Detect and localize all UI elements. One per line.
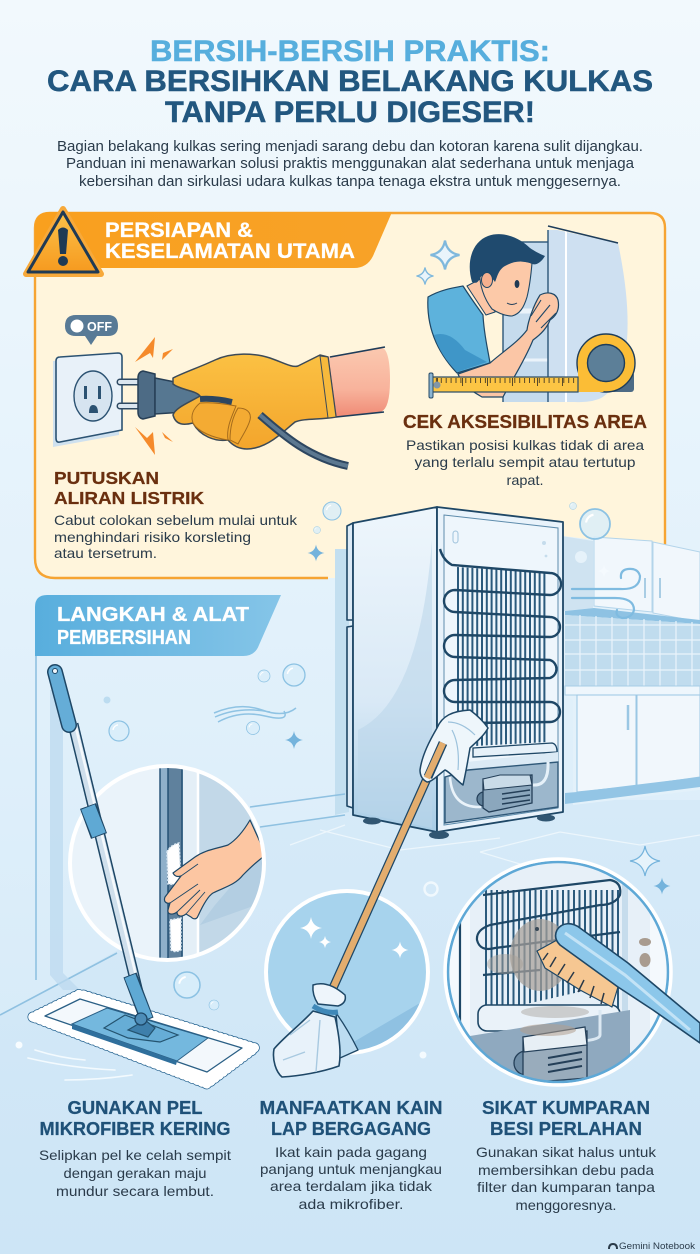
top cloth: [420, 710, 488, 785]
mop handle: [52, 668, 147, 1025]
heading: cek aksesibilitas area: CEK AKSESIBILITAS AREA: [403, 411, 647, 432]
fridge wall shadow block: [335, 549, 349, 815]
text: cek aksesibilitas area: Pastikan posisi kulkas tidak di area: [406, 437, 644, 453]
icon: wind lines: [572, 569, 640, 618]
panel: persiapan dan keselamatan: [26, 209, 665, 600]
fridge coil pipe: [440, 549, 561, 723]
step 2 heading: LAP BERGAGANG: [271, 1119, 431, 1139]
gemini notebook credit: Gemini Notebook: [619, 1241, 695, 1252]
step 1 text: [39, 1147, 231, 1199]
heading: putuskan aliran listrik: PUTUSKAN: [54, 468, 159, 488]
cloth on pole illustration: [273, 710, 488, 1077]
step 3 heading: BESI PERLAHAN: [490, 1119, 642, 1139]
circle: hand sliding microfiber into gap: [68, 764, 266, 962]
icon: off switch bubble: OFF: [87, 320, 112, 334]
kitchen background: [555, 535, 700, 805]
text: cek aksesibilitas area: rapat.: [506, 472, 544, 488]
step 3 text: membersihkan debu pada: [478, 1162, 654, 1178]
intro paragraph: Bagian belakang kulkas sering menjadi sarang debu dan kotoran karena sulit dijangkau.: [57, 139, 643, 155]
icon: sparks: [135, 337, 173, 455]
panel header: [35, 212, 392, 268]
panel header: KESELAMATAN UTAMA: [105, 240, 355, 263]
step 1 text: dengan gerakan maju: [64, 1165, 206, 1181]
text: putuskan aliran listrik: atau tersetrum.: [54, 545, 157, 561]
icon: wall outlet: [53, 353, 122, 447]
bottom cloth: [336, 1013, 358, 1058]
heading: putuskan aliran listrik: [54, 468, 204, 508]
title: [47, 35, 653, 129]
title: TANPA PERLU DIGESER!: [165, 96, 535, 129]
step 2 text: panjang untuk menjangkau: [260, 1161, 442, 1177]
icon: man checking fridge with tape measure: [428, 226, 635, 407]
step 2 text: area terdalam jika tidak: [270, 1178, 433, 1194]
step 1 heading: [40, 1098, 230, 1139]
icon: off switch bubble: [65, 315, 118, 345]
fridge cooling fins: [457, 562, 548, 752]
step 3 text: filter dan kumparan tanpa: [477, 1179, 655, 1195]
heading: putuskan aliran listrik: ALIRAN LISTRIK: [54, 488, 204, 508]
step 1 heading: MIKROFIBER KERING: [40, 1119, 230, 1139]
step 2 text: Ikat kain pada gagang: [275, 1144, 427, 1160]
step 3 text: Gunakan sikat halus untuk: [476, 1144, 657, 1160]
text: cek aksesibilitas area: yang terlalu sempit atau tertutup: [414, 454, 636, 470]
step 2 heading: MANFAATKAN KAIN: [260, 1098, 442, 1118]
section banner: langkah dan alat: [35, 595, 281, 656]
step 1 heading: GUNAKAN PEL: [68, 1098, 202, 1118]
floor: [0, 790, 700, 1254]
circle: brushing dust from coil: [445, 859, 700, 1090]
icon: warning triangle: [26, 209, 101, 274]
icon: scrub brush: [537, 924, 700, 1043]
step 2 heading: [260, 1098, 442, 1139]
step 2 text: ada mikrofiber.: [298, 1196, 404, 1212]
mop illustration: [16, 668, 255, 1084]
mop shadow: [50, 690, 80, 990]
intro paragraph: [57, 139, 643, 190]
text: putuskan aliran listrik: Cabut colokan sebelum mulai untuk: [54, 512, 298, 528]
bubbles and sparkles around fridge: [104, 502, 670, 1058]
intro paragraph: kebersihan dan sirkulasi udara kulkas tanpa tenaga ekstra untuk menggesernya.: [79, 174, 621, 190]
step 3 text: menggoresnya.: [516, 1197, 616, 1213]
step 1 text: Selipkan pel ke celah sempit: [39, 1147, 231, 1163]
step 3 heading: [482, 1098, 650, 1139]
intro paragraph: Panduan ini menawarkan solusi praktis menggunakan alat sederhana untuk menjaga: [66, 156, 635, 172]
text: putuskan aliran listrik: menghindari risiko korsleting: [54, 529, 251, 545]
title: CARA BERSIHKAN BELAKANG KULKAS: [47, 65, 653, 98]
text: cek aksesibilitas area: [406, 437, 644, 488]
fridge back illustration: [347, 507, 563, 839]
section banner: langkah dan alat: PEMBERSIHAN: [57, 627, 191, 649]
step 3 heading: SIKAT KUMPARAN: [482, 1098, 650, 1118]
decorative floor tiles: [290, 825, 700, 870]
text: putuskan aliran listrik: [54, 512, 298, 561]
circle: cloth mop spot: [266, 891, 428, 1060]
mop head: [33, 994, 255, 1084]
icon: plug and gloved hand: [120, 347, 390, 466]
title: BERSIH-BERSIH PRAKTIS:: [150, 35, 550, 68]
step 1 text: mundur secara lembut.: [56, 1183, 214, 1199]
step 3 text: [476, 1144, 657, 1213]
icon: sparkles near man: [416, 240, 460, 284]
panel header: PERSIAPAN &: [105, 219, 253, 242]
wall baseboard: [0, 656, 345, 1015]
step 2 text: [260, 1144, 442, 1212]
section banner: langkah dan alat: LANGKAH & ALAT: [57, 604, 249, 626]
